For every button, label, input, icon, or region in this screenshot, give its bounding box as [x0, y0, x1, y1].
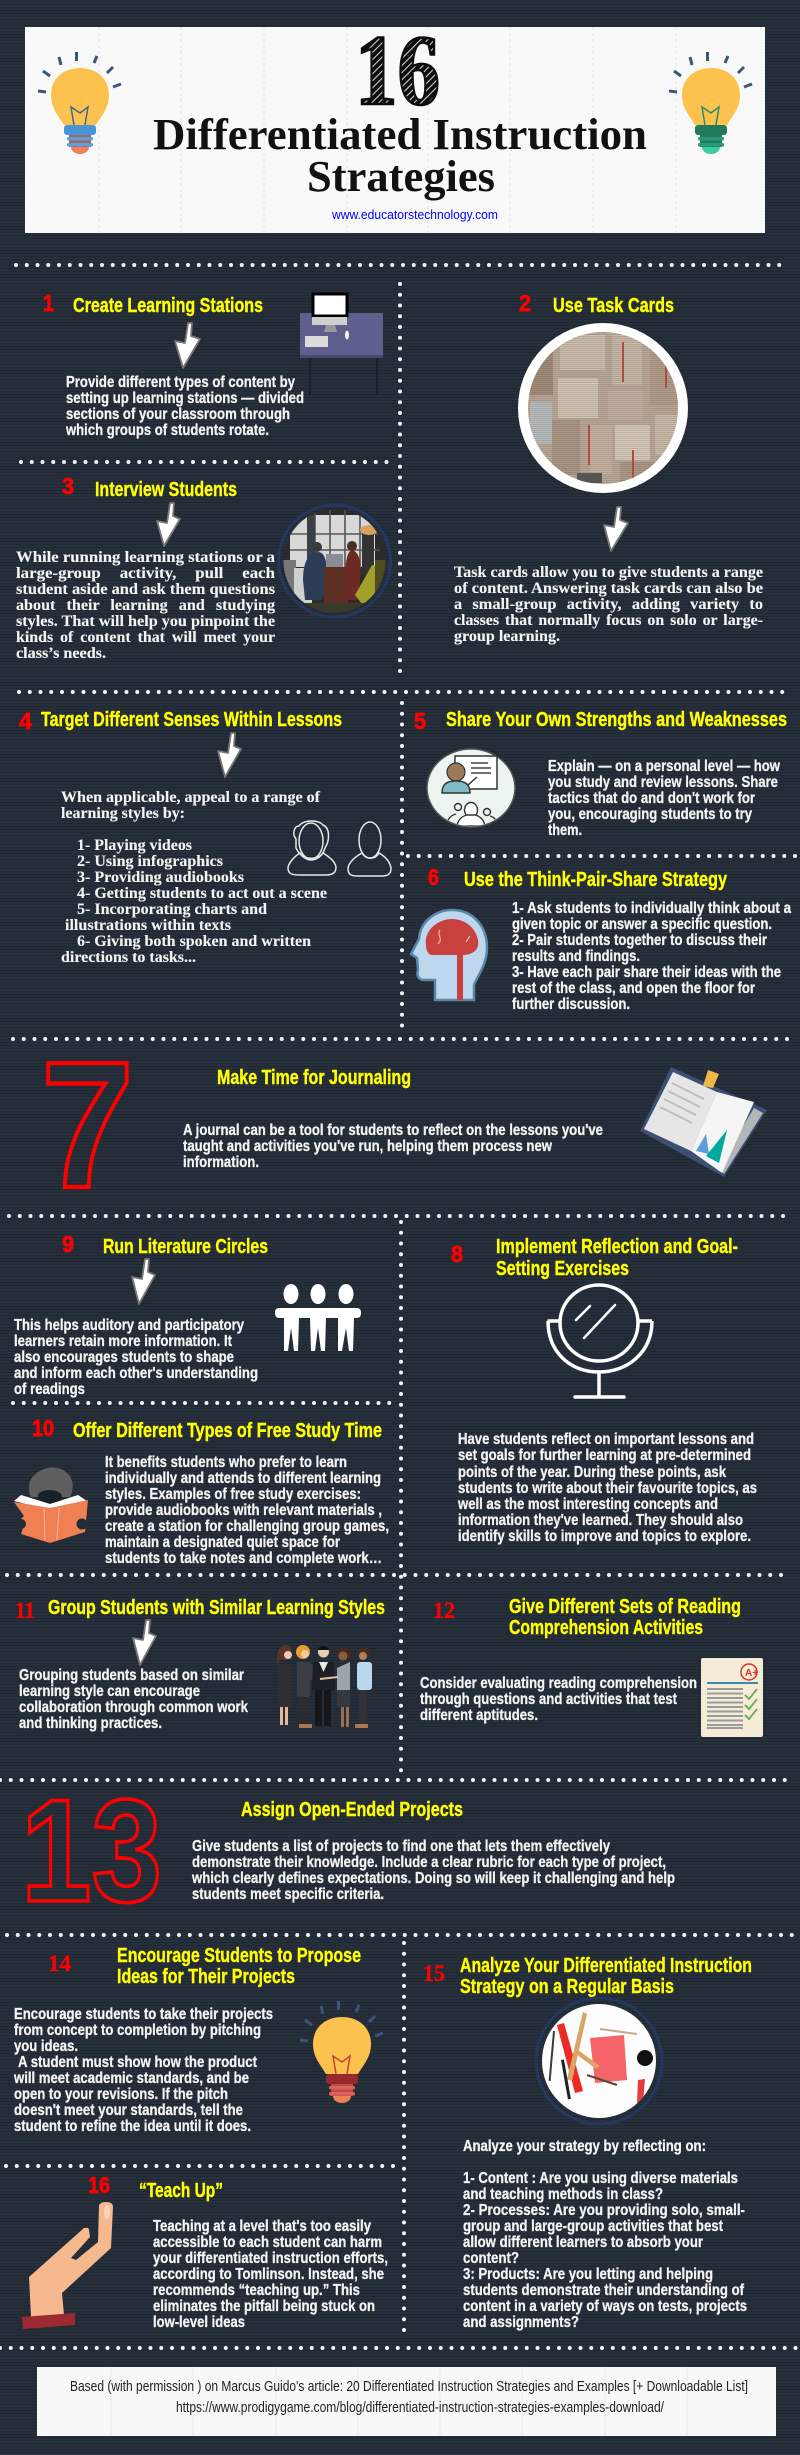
- arrow 4: [218, 733, 241, 777]
- body text 2: [454, 564, 763, 645]
- body text 7: information.: [183, 1154, 259, 1171]
- body text 3: styles. That will help you pinpoint the: [16, 613, 275, 630]
- body text 14: will meet academic standards, and be: [13, 2070, 249, 2087]
- body text 16: [153, 2218, 388, 2331]
- body text 11: collaboration through common work: [19, 1699, 248, 1716]
- icon: group of students: [277, 1645, 372, 1728]
- body text 4: [61, 789, 327, 966]
- panel: strategy 2: [454, 290, 763, 645]
- number 13 outline: 13: [21, 1769, 162, 1932]
- body text 15: allow different learners to absorb your: [463, 2234, 703, 2251]
- number 14: 14: [48, 1951, 72, 1976]
- heading 13: Assign Open-Ended Projects: [241, 1798, 463, 1821]
- number 6: 6: [428, 864, 439, 890]
- header url: www.educatorstechnology.com: [331, 207, 498, 222]
- body text 2: classes that normally focus on solo or large-: [454, 612, 763, 629]
- number 12: 12: [433, 1598, 455, 1623]
- body text 1: sections of your classroom through: [66, 406, 290, 423]
- panel: strategy 7: [41, 1025, 767, 1226]
- heading 16: “Teach Up”: [139, 2179, 223, 2202]
- body text 16: according to Tomlinson. Instead, she: [153, 2266, 384, 2283]
- body text 3: large-group activity, pull each: [16, 565, 275, 582]
- body text 3: about their learning and studying: [16, 597, 275, 614]
- number 8: 8: [451, 1241, 463, 1267]
- body text 4: When applicable, appeal to a range of: [61, 789, 321, 806]
- body text 15: and assignments?: [463, 2314, 579, 2331]
- body text 4: 3- Providing audiobooks: [77, 869, 244, 886]
- icon: mirror: [548, 1285, 652, 1397]
- icon: open journal: [640, 1067, 767, 1177]
- body text 3: [16, 549, 275, 662]
- body text 16: eliminates the pitfall being stuck on: [153, 2298, 375, 2315]
- panel: strategy 1: [43, 290, 383, 439]
- photo: student interview: [278, 505, 390, 617]
- body text 6: [512, 900, 791, 1013]
- panel: strategy 4: [19, 708, 391, 966]
- photo: pile of open books: [518, 323, 688, 493]
- number 15: 15: [423, 1961, 445, 1986]
- body text 15: content?: [463, 2250, 519, 2267]
- header panel: [25, 14, 765, 233]
- body text 9: of readings: [14, 1381, 85, 1398]
- body text 16: accessible to each student can harm: [153, 2234, 382, 2251]
- number 16: 16: [88, 2172, 110, 2198]
- body text 11: and thinking practices.: [19, 1715, 162, 1732]
- body text 3: student aside and ask them questions: [16, 581, 275, 598]
- body text 15: 1- Content : Are you using diverse materials: [463, 2170, 738, 2187]
- body text 1: [65, 374, 304, 439]
- heading 15: [460, 1954, 752, 1998]
- body text 15: students demonstrate their understanding of: [463, 2282, 745, 2299]
- body text 15: content in a variety of ways on tests, projects: [463, 2298, 747, 2315]
- body text 2: group learning.: [454, 628, 560, 645]
- body text 15: 2- Processes: Are you providing solo, small-: [463, 2202, 745, 2219]
- heading 1: Create Learning Stations: [73, 294, 263, 317]
- body text 4: 1- Playing videos: [77, 837, 192, 854]
- body text 12: through questions and activities that test: [420, 1691, 678, 1708]
- body text 4: 2- Using infographics: [77, 853, 223, 870]
- photo: desk with stationery: [536, 1998, 662, 2124]
- body text 6: rest of the class, and open the floor for: [512, 980, 755, 997]
- icon: sketched people: [288, 821, 391, 876]
- body text 12: different aptitudes.: [420, 1707, 538, 1724]
- body text 14: student to refine the idea until it does.: [14, 2118, 251, 2135]
- body text 2: of content. Answering task cards can also be: [454, 580, 763, 597]
- heading 11: Group Students with Similar Learning Styles: [48, 1596, 385, 1619]
- body text 2: Task cards allow you to give students a range: [454, 564, 763, 581]
- number 4: 4: [19, 708, 32, 734]
- body text 7: taught and activities you've run, helping them process new: [183, 1138, 552, 1155]
- heading 10: Offer Different Types of Free Study Time: [73, 1419, 382, 1442]
- panel: strategy 3: [16, 473, 390, 662]
- heading 3: Interview Students: [95, 478, 237, 501]
- body text 1: Provide different types of content by: [66, 374, 295, 391]
- body text 8: information they've learned. They should also: [458, 1512, 743, 1529]
- body text 9: learners retain more information. It: [14, 1333, 233, 1350]
- body text 5: you, encouraging students to try: [548, 806, 752, 823]
- heading 8: Setting Exercises: [496, 1257, 629, 1280]
- arrow 1: [175, 323, 200, 368]
- body text 16: Teaching at a level that's too easily: [153, 2218, 371, 2235]
- body text 10: styles. Examples of free study exercises:: [105, 1486, 361, 1503]
- body text 14: doesn't meet your standards, tell the: [14, 2102, 243, 2119]
- panel: strategy 9: [14, 1231, 361, 1398]
- heading 14: Encourage Students to Propose: [117, 1944, 361, 1967]
- arrow 3: [157, 503, 180, 546]
- number 1: 1: [43, 290, 54, 316]
- arrow 9: [132, 1259, 155, 1304]
- body text 15: and teaching methods in class?: [463, 2186, 663, 2203]
- panel: strategy 16: [22, 2172, 388, 2331]
- number 11: 11: [15, 1598, 35, 1623]
- heading 6: Use the Think-Pair-Share Strategy: [464, 868, 727, 891]
- body text 13: Give students a list of projects to find one that lets them effectively: [192, 1838, 610, 1855]
- body text 14: A student must show how the product: [18, 2054, 258, 2071]
- body text 14: you ideas.: [14, 2038, 78, 2055]
- body text 10: individually and attends to different learning: [105, 1470, 381, 1487]
- body text 10: maintain a designated quiet space for: [105, 1534, 340, 1551]
- body text 15: [463, 2138, 747, 2331]
- arrow 11: [133, 1620, 156, 1665]
- header title number: 16: [355, 14, 440, 126]
- heading 15: Strategy on a Regular Basis: [460, 1975, 674, 1998]
- header title line 2: Strategies: [307, 152, 495, 201]
- body text 9: also encourages students to shape: [14, 1349, 234, 1366]
- body text 8: [457, 1431, 757, 1545]
- heading 14: Ideas for Their Projects: [117, 1965, 295, 1988]
- body text 12: [420, 1675, 697, 1724]
- heading 8: [496, 1235, 738, 1280]
- panel: strategy 5: [414, 708, 787, 839]
- icon: graded paper: [701, 1658, 763, 1737]
- arrow 2: [604, 507, 628, 551]
- footer url: https://www.prodigygame.com/blog/differentiated-instruction-strategies-examples-download/: [176, 2399, 665, 2416]
- body text 15: Analyze your strategy by reflecting on:: [463, 2138, 706, 2155]
- body text 4: directions to tasks...: [61, 949, 196, 966]
- body text 5: tactics that do and don't work for: [548, 790, 755, 807]
- body text 3: class’s needs.: [16, 645, 106, 662]
- panel: strategy 10: [14, 1415, 389, 1567]
- panel: strategy 8: [451, 1235, 757, 1545]
- body text 15: 3: Products: Are you letting and helping: [463, 2266, 713, 2283]
- icon: red light bulb: [300, 2001, 383, 2103]
- body text 10: It benefits students who prefer to learn: [105, 1454, 347, 1471]
- body text 1: which groups of students rotate.: [65, 422, 269, 439]
- body text 13: demonstrate their knowledge. Include a clear rubric for each type of project,: [192, 1854, 666, 1871]
- body text 5: [548, 758, 780, 839]
- icon: three people at a table: [275, 1284, 361, 1351]
- body text 11: Grouping students based on similar: [19, 1667, 244, 1684]
- body text 16: low-level ideas: [153, 2314, 245, 2331]
- body text 15: group and large-group activities that best: [463, 2218, 724, 2235]
- body text 13: students meet specific criteria.: [192, 1886, 384, 1903]
- body text 4: illustrations within texts: [65, 917, 231, 934]
- icon: graded paper: A+: [745, 1668, 758, 1679]
- body text 10: students to take notes and complete work…: [105, 1550, 382, 1567]
- panel: strategy 12: [420, 1595, 763, 1737]
- body text 14: Encourage students to take their projects: [14, 2006, 273, 2023]
- icon: head with brain: [411, 910, 487, 1000]
- body text 12: Consider evaluating reading comprehension: [420, 1675, 697, 1692]
- body text 10: provide audiobooks with relevant materials ,: [105, 1502, 382, 1519]
- body text 3: kinds of content that will meet your: [16, 629, 275, 646]
- body text 9: [14, 1317, 258, 1398]
- heading 4: Target Different Senses Within Lessons: [41, 708, 342, 731]
- body text 16: recommends “teaching up.” This: [153, 2282, 360, 2299]
- body text 16: your differentiated instruction efforts,: [153, 2250, 388, 2267]
- body text 7: A journal can be a tool for students to reflect on the lessons you've: [183, 1122, 603, 1139]
- body text 14: [13, 2006, 273, 2135]
- panel: strategy 15: [423, 1954, 752, 2331]
- body text 7: [183, 1122, 603, 1171]
- icon: left light bulb: [38, 52, 121, 154]
- heading 8: Implement Reflection and Goal-: [496, 1235, 738, 1258]
- heading 2: Use Task Cards: [553, 294, 674, 317]
- body text 14: open to your revisions. If the pitch: [14, 2086, 228, 2103]
- body text 2: a small-group activity, adding variety to: [454, 596, 763, 613]
- heading 7: Make Time for Journaling: [217, 1066, 411, 1089]
- number 2: 2: [519, 290, 531, 316]
- body text 11: learning style can encourage: [19, 1683, 200, 1700]
- body text 10: create a station for challenging group games,: [105, 1518, 389, 1535]
- icon: raised hand: [22, 2202, 113, 2329]
- body text 10: [105, 1454, 389, 1567]
- body text 5: them.: [548, 822, 582, 839]
- heading 12: Give Different Sets of Reading: [509, 1595, 741, 1618]
- body text 6: results and findings.: [512, 948, 640, 965]
- icon: person reading a book: [14, 1467, 88, 1543]
- body text 1: setting up learning stations — divided: [66, 390, 304, 407]
- body text 13: [191, 1838, 675, 1903]
- panel: strategy 14: [13, 1944, 383, 2135]
- number 7 outline: 7: [41, 1025, 134, 1226]
- body text 4: 5- Incorporating charts and: [77, 901, 267, 918]
- body text 8: well as the most interesting concepts and: [457, 1496, 718, 1513]
- heading 14: [117, 1944, 361, 1988]
- panel: strategy 13: [21, 1769, 675, 1932]
- body text 8: points of the year. During these points, ask: [458, 1464, 726, 1481]
- number 9: 9: [62, 1231, 74, 1257]
- icon: computer desk: [300, 294, 383, 395]
- body text 4: 4- Getting students to act out a scene: [77, 885, 327, 902]
- header title line 1: Differentiated Instruction: [153, 110, 647, 159]
- panel: strategy 6: [411, 864, 791, 1013]
- icon: teacher presenting: [427, 749, 515, 827]
- body text 13: which clearly defines expectations. Doing so will keep it challenging and help: [191, 1870, 675, 1887]
- number 3: 3: [62, 473, 74, 499]
- body text 14: from concept to completion by pitching: [14, 2022, 261, 2039]
- body text 6: further discussion.: [512, 996, 630, 1013]
- body text 9: This helps auditory and participatory: [14, 1317, 244, 1334]
- body text 11: [19, 1667, 248, 1732]
- number 5: 5: [414, 708, 426, 734]
- heading 12: Comprehension Activities: [509, 1616, 703, 1639]
- body text 4: 6- Giving both spoken and written: [77, 933, 311, 950]
- footer panel: [37, 2367, 776, 2436]
- body text 4: learning styles by:: [61, 805, 185, 822]
- body text 3: While running learning stations or a: [16, 549, 275, 566]
- panel: strategy 11: [15, 1596, 385, 1732]
- body text 9: and inform each other's understanding: [14, 1365, 258, 1382]
- icon: right light bulb: [669, 52, 752, 154]
- number 10: 10: [32, 1415, 54, 1441]
- heading 9: Run Literature Circles: [103, 1235, 268, 1258]
- heading 12: [509, 1595, 741, 1639]
